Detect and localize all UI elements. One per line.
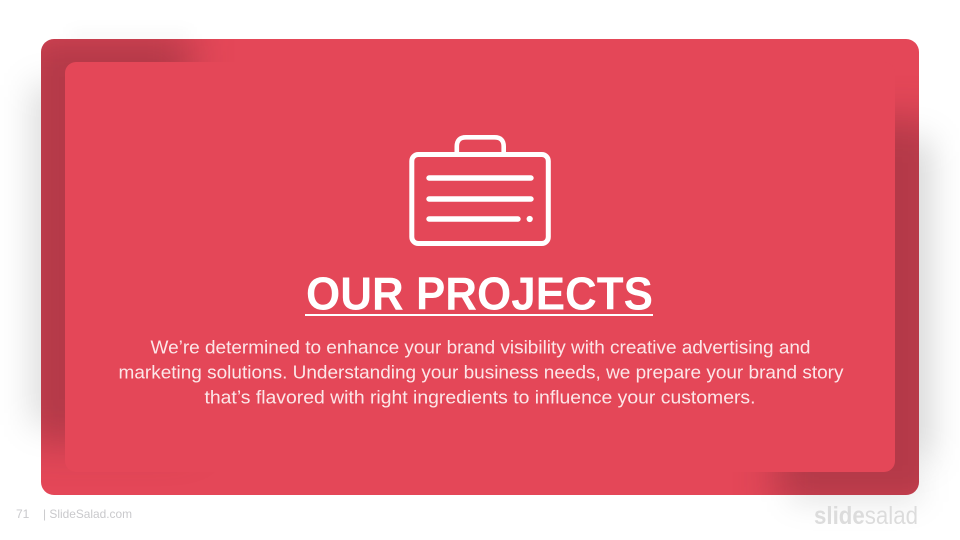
shadow: top-left behind inner panel bbox=[21, 33, 191, 443]
text block: description bbox=[118, 336, 844, 408]
text block: description: marketing solutions. Understanding your business needs, we prepare your brand story bbox=[118, 362, 844, 382]
shadow: bottom-right behind inner panel bbox=[776, 119, 946, 509]
panel: inner card bbox=[65, 62, 895, 472]
logo: slidesalad: slidesalad bbox=[814, 502, 918, 530]
panel: red card bbox=[41, 39, 919, 495]
footer site label: | SlideSalad.com bbox=[43, 507, 132, 521]
icon: briefcase bbox=[412, 137, 548, 244]
text block: description: We’re determined to enhance your brand visibility with creative advertising and bbox=[150, 336, 810, 358]
title: OUR PROJECTS bbox=[306, 268, 653, 320]
page number: 71 bbox=[16, 507, 30, 521]
text block: description: that’s flavored with right ingredients to influence your customers. bbox=[204, 386, 756, 408]
